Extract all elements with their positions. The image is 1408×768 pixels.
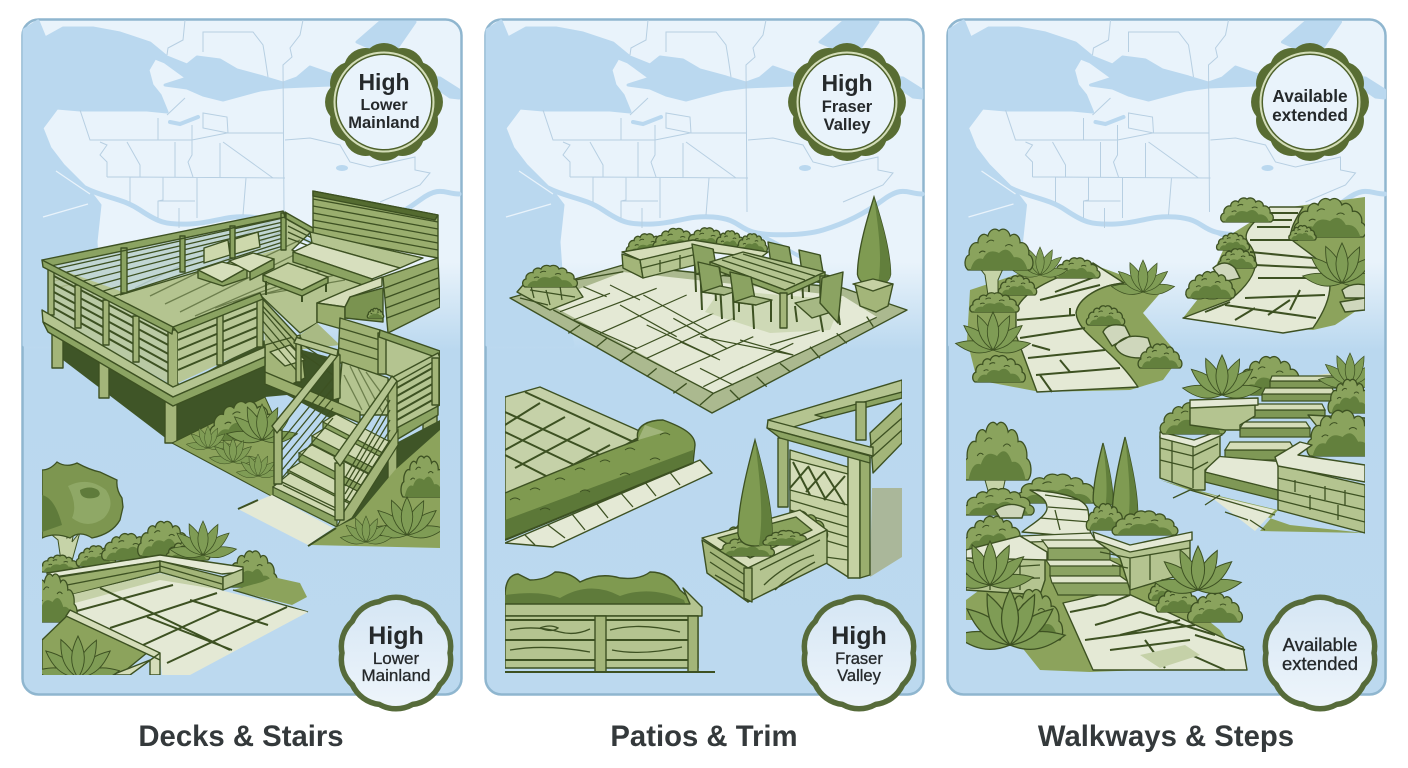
- map background: right panel: [950, 20, 1384, 345]
- deck shadow and posts: [64, 340, 338, 440]
- badge: Available extended bottom: Available: [1283, 634, 1357, 655]
- deck floor: [45, 213, 373, 333]
- illustration: winding stone walkway: [955, 229, 1182, 392]
- right landing railing: [386, 340, 440, 428]
- badge: Available extended bottom: [1265, 597, 1375, 709]
- back planter with bushes: [626, 234, 668, 254]
- panel: Decks & Stairs: [22, 20, 462, 709]
- map background: left panel: [24, 20, 459, 345]
- stair treads: [273, 414, 398, 527]
- illustration: raised timber planter: [505, 572, 715, 672]
- ground plants: [310, 430, 440, 548]
- map background: middle panel: [487, 20, 922, 345]
- potted cypress: [857, 197, 891, 285]
- badge: Available extended bottom: extended: [1282, 653, 1358, 674]
- badge: High Fraser Valley bottom: High: [831, 622, 887, 650]
- badge: High Fraser Valley bottom: Valley: [837, 667, 882, 685]
- badge: High Fraser Valley bottom: Fraser: [835, 650, 883, 668]
- chairs and dining table: [768, 242, 810, 299]
- badge: High Lower Mainland bottom: Lower: [373, 649, 419, 668]
- panel: Walkways & Steps: [946, 20, 1386, 709]
- badge: Available extended top: Available: [1272, 86, 1348, 106]
- upper stair block: [265, 335, 305, 385]
- badge: High Lower Mainland bottom: [341, 597, 451, 709]
- back posts under landing: [422, 416, 438, 430]
- badge: Available extended top: extended: [1272, 105, 1348, 125]
- illustration: stone steps with retaining walls: [1160, 353, 1382, 533]
- heading: Decks & Stairs: Decks & Stairs: [138, 720, 344, 753]
- badge: High Fraser Valley top: Valley: [824, 116, 871, 134]
- badge: High Lower Mainland top: Lower: [360, 97, 408, 114]
- badge: Available extended top: [1251, 43, 1369, 161]
- badge: High Fraser Valley bottom: [804, 597, 914, 709]
- lounge furniture: [204, 240, 230, 263]
- back cable railing: [55, 219, 280, 291]
- illustration: garden path with steps: [946, 422, 1247, 672]
- heading: Patios & Trim: Patios & Trim: [610, 720, 798, 753]
- illustration: curved path with steps: [1183, 197, 1382, 333]
- illustration: elevated deck with stairs: [42, 191, 447, 548]
- badge: High Fraser Valley top: [788, 43, 906, 161]
- illustration: patio corner with tree: [28, 462, 308, 684]
- stone planter left: [517, 277, 583, 310]
- heading: Walkways & Steps: Walkways & Steps: [1038, 720, 1294, 753]
- concrete pad: [238, 495, 333, 545]
- badge: High Lower Mainland bottom: Mainland: [362, 666, 430, 685]
- panel: Patios & Trim: [486, 20, 924, 709]
- badge: High Lower Mainland top: [325, 43, 443, 161]
- back screen: [313, 191, 438, 258]
- illustration: paved patio with dining set: [510, 197, 907, 413]
- badge: High Fraser Valley top: Fraser: [822, 98, 873, 116]
- badge: High Lower Mainland bottom: High: [368, 622, 424, 650]
- fascia: [42, 310, 265, 397]
- badge: High Lower Mainland top: High: [358, 69, 410, 95]
- upper stair rail: [262, 310, 296, 370]
- front right railing: [178, 298, 260, 383]
- illustration: paving with clipped hedge: [505, 387, 712, 547]
- landing: [338, 362, 392, 415]
- badge: High Lower Mainland top: Mainland: [348, 114, 420, 132]
- front left railing: [53, 274, 168, 382]
- stair railings: [282, 343, 390, 510]
- badge: High Fraser Valley top: High: [821, 70, 873, 96]
- illustration: pergola screen with planter box: [702, 380, 902, 602]
- wall and planter block: [383, 258, 440, 333]
